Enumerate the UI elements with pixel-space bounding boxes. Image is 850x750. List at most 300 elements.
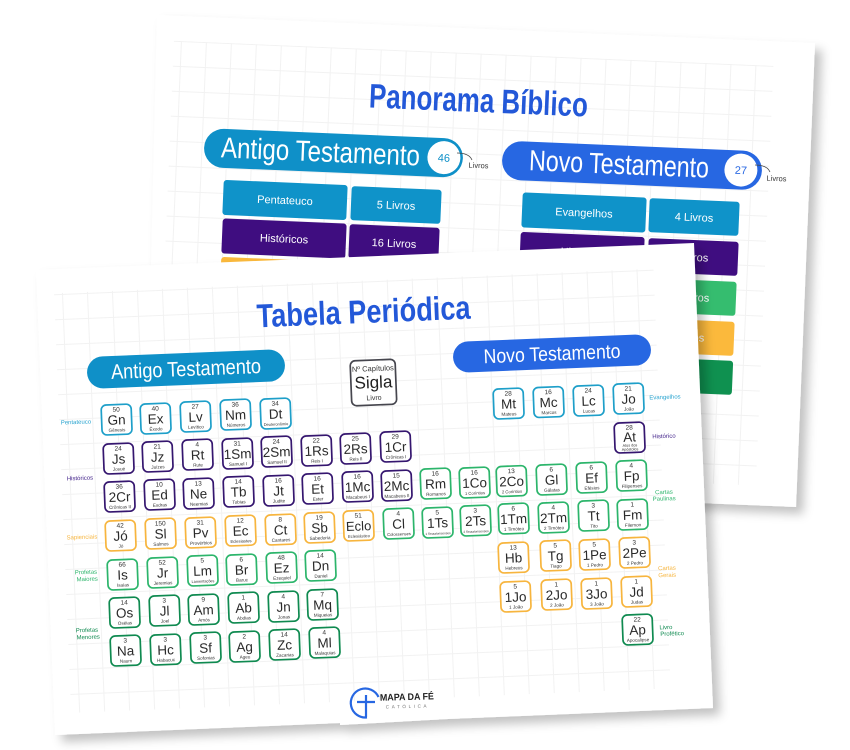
cell: Is: Is — [117, 567, 128, 583]
row: Históricos NT — [519, 232, 645, 272]
cell: 1Co — [459, 467, 490, 498]
cell: 1Ts — [422, 507, 453, 538]
cell: Jt — [263, 475, 294, 506]
cell: Ap: Ap — [629, 622, 646, 638]
cell: Ec: Eclesiastes — [230, 538, 252, 544]
legend cell: Nº Capítulos, Sigla, Livro: Sigla — [354, 372, 393, 393]
cell: 3Jo: 1 — [594, 580, 599, 588]
cell: 1Ts: 1Ts — [427, 515, 449, 531]
side label: Cartas Gerais: Cartas — [658, 566, 676, 572]
cell: Jz: Juízes — [151, 464, 165, 470]
cell: Ml: 4 — [322, 629, 327, 637]
cell: 1Rs — [301, 435, 332, 466]
cell: Is: 66 — [118, 561, 126, 569]
cell: Tb: Tb — [230, 484, 247, 500]
cell: 1Jo — [500, 581, 531, 612]
side label: Profetas Menores: Profetas — [76, 628, 98, 634]
pill: Novo Testamento: Novo Testamento — [483, 341, 621, 368]
cell: Pv: 31 — [196, 519, 204, 527]
row: Históricos NT: Histórico — [560, 246, 604, 260]
cell: Gn: Gênesis — [108, 427, 126, 433]
periodic table cells — [101, 383, 653, 666]
pill: Novo Testamento 27 livros: Novo Testamento — [528, 145, 710, 185]
cell: Hb: Hb — [505, 550, 523, 566]
cell: Ct: Cantares — [272, 537, 291, 543]
cell: 2Cr — [104, 481, 135, 512]
cell: 2Co — [496, 466, 527, 497]
table: Novo Testamento categories — [519, 192, 740, 395]
cell: Ed: Esdras — [153, 502, 168, 508]
cell: 2Jo: 1 — [554, 581, 559, 589]
cell: Tt: 3 — [591, 502, 596, 510]
cell: Sf: 3 — [203, 634, 208, 642]
cell: Nm: 36 — [231, 401, 239, 409]
annotation: Livros 27 — [755, 165, 787, 183]
cell: Dn: Dn — [312, 558, 330, 574]
cell: Js — [103, 443, 134, 474]
cell: 1Jo: 1 João — [509, 604, 523, 610]
cell: Jó: Jó — [118, 543, 124, 549]
row: 5 Livros: 5 Livros — [376, 199, 416, 213]
cell: Lc: Lucas — [583, 408, 596, 414]
cell: Jt: 16 — [274, 477, 282, 485]
cell: Tb — [223, 476, 254, 507]
cell: Zc — [269, 629, 300, 660]
cell: Ml — [309, 627, 340, 658]
side label: Pentateuco: Pentateuco — [61, 419, 92, 427]
cell: Os: 14 — [120, 599, 128, 607]
row: 5 Livros NT — [647, 238, 739, 276]
cell: Sb: 19 — [315, 514, 323, 522]
cell: 1Mc: 1Mc — [345, 479, 371, 495]
cell: Hc: 3 — [163, 636, 168, 644]
cell: Eclo: Eclo — [346, 518, 372, 534]
cell: Ne: Ne — [190, 486, 208, 502]
cell: Ag: 2 — [242, 633, 247, 641]
cell: 2Co: 2 Coríntios — [502, 489, 522, 494]
cell: Lm — [187, 555, 218, 586]
cell: Sl — [145, 518, 176, 549]
cell: Ct: Ct — [274, 522, 288, 538]
side label: Histórico: Histórico — [652, 434, 676, 440]
cell: Ec — [225, 515, 256, 546]
row: Cartas Paulinas count: 14 Livros — [664, 291, 710, 305]
cell: Jr: Jr — [157, 565, 169, 581]
cell: Lm: 5 — [200, 557, 205, 565]
cell: Ct — [265, 514, 296, 545]
pill: Antigo Testamento 46 livros: 46 — [437, 152, 450, 165]
cell: 1Pe: 1Pe — [582, 547, 607, 563]
cell: Sf: Sofonias — [197, 655, 216, 661]
cell: Rm: 16 — [431, 470, 439, 478]
side label: Cartas Gerais: Gerais — [658, 573, 676, 579]
pill: Antigo Testamento — [86, 349, 286, 389]
cell: Jo: João — [624, 406, 635, 412]
row: Históricos: Históricos — [260, 232, 309, 247]
cell: 1Sm: 31 — [233, 440, 241, 448]
cell: Cl: Colossenses — [387, 531, 411, 537]
cell: 2Ts — [460, 505, 491, 536]
cell: Jl — [149, 595, 180, 626]
cell: 2Pe: 3 — [632, 539, 637, 547]
cell: Am: Amós — [198, 617, 211, 623]
cell: Tb: Tobias — [232, 499, 246, 505]
cell: Dt — [260, 398, 291, 429]
cell: 2Tm: 2Tm — [540, 510, 567, 526]
cell: Lm: Lamentações — [192, 579, 215, 584]
side label: Históricos: Históricos — [67, 476, 93, 482]
cell: Mc: Marcos — [541, 410, 557, 415]
cell: Fp: Filipenses — [622, 483, 643, 489]
cell: Dt: 34 — [271, 400, 279, 408]
cell: Dn — [305, 550, 336, 581]
cell: 1Mc: Macabeus I — [346, 494, 370, 500]
cell: Ct: 8 — [278, 516, 283, 524]
cell: Sl: 150 — [155, 520, 166, 528]
cell: 1Tm: 1 Timóteo — [504, 526, 525, 532]
cell: Mq: Miqueias — [314, 612, 333, 618]
cell: Jó: 42 — [116, 522, 124, 530]
cell: Jt: Jt — [273, 483, 284, 499]
cell: Br — [226, 554, 257, 585]
cell: Br: Br — [235, 562, 249, 578]
cell: Js: Josué — [113, 466, 126, 472]
cell: Sl: Sl — [154, 526, 167, 542]
cell: Fm: Fm — [623, 507, 643, 523]
cell: Hb: 13 — [509, 544, 517, 552]
row: Profético count: 1 Livro — [667, 370, 700, 384]
row: Cartas Gerais count: 7 Livros — [665, 331, 705, 345]
cell: Ed: 10 — [155, 481, 163, 489]
cell: Lc — [573, 385, 604, 416]
cell: 2Mc — [381, 470, 412, 501]
cell: 1Tm — [498, 503, 529, 534]
cell: Jd: Judas — [631, 599, 644, 605]
cell: At: Atos dos — [622, 443, 637, 448]
cell: Mt: Mateus — [501, 411, 517, 417]
cell: 1Pe: 1 Pedro — [587, 562, 604, 568]
cell: Mt: Mt — [501, 396, 517, 412]
cell: 2Ts: 2 Tessalonicenses — [463, 529, 489, 534]
cell: 1Co: 16 — [470, 469, 478, 477]
cell: 2Rs: Reis II — [349, 456, 363, 462]
cell: Lm: Lm — [193, 563, 212, 579]
cell: Fm — [617, 499, 648, 530]
row: Profético count — [642, 357, 733, 395]
legend cell: Nº Capítulos, Sigla, Livro: Nº Capítulos — [352, 363, 394, 374]
side label: Profetas Maiores: Maiores — [76, 577, 98, 583]
row: Evangelhos — [521, 192, 647, 233]
side label: Sapienciais: Sapienciais — [67, 534, 97, 542]
cell: Ab — [228, 592, 259, 623]
cell: Jr: 52 — [158, 559, 166, 567]
cell: 2Rs: 2Rs — [343, 441, 368, 457]
cell: Mc — [533, 387, 564, 418]
cell: 2Co: 13 — [507, 468, 515, 475]
cell: Sb: Sb — [311, 520, 328, 536]
cell: Gl: Gl — [545, 472, 559, 488]
cell: Ne: Neemias — [190, 501, 209, 507]
side label: Profetas Menores: Menores — [76, 635, 100, 641]
cell: Is — [107, 559, 138, 590]
cell: 3Jo: 3Jo — [585, 586, 608, 602]
cell: Sf: Sf — [199, 640, 213, 656]
cell: Zc: 14 — [280, 631, 288, 639]
logo subtitle: CATÓLICA — [386, 702, 429, 710]
cell: Jó: Jó — [113, 528, 128, 544]
row: 5 Livros — [350, 186, 442, 224]
cell: 1Rs: 22 — [312, 437, 320, 445]
cell: Na: 3 — [123, 637, 128, 645]
side label: Cartas Paulinas: Cartas — [655, 490, 673, 496]
row: Históricos — [221, 218, 347, 259]
cell: Ap: 22 — [633, 616, 641, 624]
pill: Novo Testamento — [452, 334, 652, 373]
pill: Novo Testamento 27 livros: 27 — [734, 165, 747, 177]
cell: 2Co: 2Co — [499, 474, 524, 490]
cell: Ag: Ag — [236, 639, 253, 655]
cell: Gl — [536, 464, 567, 495]
cell: 1Co: 1 Coríntios — [465, 490, 485, 496]
cell: Jó — [105, 520, 136, 551]
cell: Eclo: Eclesiástico — [348, 533, 371, 539]
cell: Pv: Pv — [192, 525, 209, 541]
cell: Lv: Lv — [188, 409, 203, 425]
cell: Hc — [150, 634, 181, 665]
panel: Panorama Bíblico sheet — [146, 15, 815, 507]
cell: Br: Baruc — [236, 577, 249, 583]
cell: Fp — [616, 460, 647, 491]
cell: Lc: Lc — [581, 393, 596, 409]
cell: Is: Isaías — [117, 582, 130, 588]
cell: Ez — [266, 552, 297, 583]
cell: 2Mc: Macabeus II — [384, 493, 410, 499]
cell: Ex: 40 — [151, 405, 159, 413]
cell: Jn: Jonas — [278, 614, 291, 620]
cell: Sb — [304, 512, 335, 543]
cell: Tg: Tg — [547, 548, 564, 564]
cell: Sf — [190, 632, 221, 663]
cell: Hc: Hc — [157, 642, 174, 658]
cell: 1Sm: 1Sm — [223, 446, 252, 462]
cell: Et: Ester — [313, 496, 324, 502]
cell: Ef — [576, 462, 607, 493]
cell: Eclo — [343, 510, 374, 541]
cell: Lv — [180, 401, 211, 432]
cell: 2Rs — [340, 433, 371, 464]
cell: Jr — [147, 557, 178, 588]
cell: Tt: Tt — [587, 508, 600, 524]
cell: Ec: 12 — [236, 517, 244, 525]
cell: Rm: Rm — [425, 476, 446, 492]
cell: Br: 6 — [239, 556, 244, 564]
cell: 1Cr: 1Cr — [384, 439, 407, 455]
cell: Dt: Dt — [269, 406, 283, 422]
cell: 2Sm: Samuel II — [267, 459, 287, 465]
cell: 1Sm — [222, 438, 253, 469]
side label: Cartas Paulinas: Paulinas — [653, 496, 676, 503]
cell: Os — [109, 597, 140, 628]
cell: Ez: Ez — [273, 560, 290, 576]
cell: Am — [188, 594, 219, 625]
cell: Tt: Tito — [590, 523, 598, 529]
cell: Et — [302, 473, 333, 504]
cell: Cl: 4 — [396, 510, 401, 518]
cell: Ap — [622, 614, 653, 645]
cell: Cl: Cl — [392, 516, 405, 532]
cell: 1Jo: 1Jo — [504, 589, 527, 605]
cell: Lv: Levítico — [188, 424, 204, 430]
title: Panorama Bíblico: Panorama Bíblico — [368, 77, 589, 125]
row: Evangelhos: Evangelhos — [555, 206, 613, 221]
cell: Jz: 21 — [153, 443, 161, 451]
cell: Pv: Provérbios — [190, 540, 213, 546]
cell: 1Sm: Samuel I — [229, 461, 247, 467]
cell: Cl — [383, 508, 414, 539]
cell: 1Co: 1Co — [462, 475, 487, 491]
cell: 2Tm — [538, 502, 569, 533]
cell: 1Pe: 5 — [592, 541, 597, 549]
cell: Pv — [185, 517, 216, 548]
logo wordmark: MAPA DA FÉ — [380, 691, 434, 704]
cell: Rt: 4 — [195, 441, 200, 449]
cell: Js: Js — [112, 451, 126, 467]
cell: Dn: Daniel — [314, 573, 328, 579]
cell: Ef: Ef — [585, 470, 599, 486]
cell: Fm: 1 — [630, 501, 635, 509]
cell: Hb: Hebreus — [505, 565, 523, 571]
cell: Ed: Ed — [151, 487, 168, 503]
cell: Am: Am — [193, 602, 214, 618]
cell: Rt: Rt — [191, 447, 205, 463]
cell: Jl: 3 — [162, 597, 167, 605]
cell: Tg: 5 — [553, 542, 558, 550]
cell: Ab: Ab — [235, 600, 252, 616]
cell: Hb — [498, 542, 529, 573]
cell: Dt: Deuteronômio — [264, 421, 288, 427]
cell: Nm — [220, 399, 251, 430]
cell: Mq: Mq — [313, 597, 332, 613]
cell: Ez: Ezequiel — [273, 575, 291, 581]
cell: 1Tm: 6 — [511, 505, 516, 513]
cell: Ex — [140, 403, 171, 434]
cell: Lv: 27 — [191, 403, 199, 411]
cell: 1Cr: Crônicas I — [386, 454, 406, 460]
cell: Ed — [144, 479, 175, 510]
row: 16 Livros — [348, 224, 440, 262]
cell: 1Mc: 16 — [353, 473, 361, 481]
cell: Jo: Jo — [621, 391, 636, 407]
cell: 1Tm: 1Tm — [500, 511, 527, 527]
cell: Jn: Jn — [276, 599, 291, 615]
cell: Gn — [101, 404, 132, 435]
cell: Jn: 4 — [281, 593, 286, 601]
cell: At: Apóstolos — [622, 447, 639, 452]
cell: Ap: Apocalipse — [627, 637, 650, 643]
cell: Gn: 50 — [112, 406, 120, 414]
cell: Gn: Gn — [107, 412, 126, 428]
cell: Fm: Filemon — [625, 522, 642, 528]
side label: Profetas Maiores: Profetas — [75, 570, 97, 576]
cell: Jd — [621, 576, 652, 607]
cell: 2Jo: 2 João — [550, 602, 564, 608]
cell: 1Ts: 1 Tessalonicenses — [425, 531, 451, 536]
cell: Rt — [182, 439, 213, 470]
cell: 2Pe: 2 Pedro — [627, 560, 644, 566]
cell: 1Ts: 5 — [435, 509, 440, 517]
cell: Fp: Fp — [623, 468, 640, 484]
cell: 1Mc — [342, 471, 373, 502]
cell: 2Pe — [619, 537, 650, 568]
cell: Jn — [268, 591, 299, 622]
cell: 2Mc: 2Mc — [384, 478, 410, 494]
cell: Jr: Jeremias — [154, 580, 173, 586]
cell: Na: Naum — [120, 658, 132, 664]
cell: 2Rs: 25 — [351, 435, 359, 443]
cell: Os: Os — [116, 605, 134, 621]
cell: Et: 16 — [313, 475, 321, 483]
cell: 2Ts: 2Ts — [465, 513, 487, 529]
cell: Gl: Gálatas — [544, 487, 561, 493]
cell: Dn: 14 — [316, 552, 324, 560]
cell: Ex: Ex — [147, 411, 164, 427]
cell: Jo — [613, 383, 644, 414]
pill: Antigo Testamento: Antigo Testamento — [111, 355, 261, 384]
cell: Gl: 6 — [549, 466, 554, 474]
cell: Mt: 28 — [504, 390, 512, 398]
annotation: Livros 46 — [457, 153, 489, 170]
cell: Ec: Ec — [232, 523, 249, 539]
cell: Jd: Jd — [629, 584, 644, 600]
row: Sapienciais: Sapienciais — [254, 271, 311, 285]
cell: Am: 9 — [201, 596, 206, 604]
cell: Fp: 4 — [629, 462, 634, 470]
cell: 1Rs: Reis I — [311, 458, 323, 464]
cell: Hc: Habacuc — [157, 657, 176, 663]
cell: 2Sm: 2Sm — [262, 444, 291, 460]
cell: Ef: 6 — [589, 464, 594, 472]
cell: 2Sm — [261, 436, 292, 467]
pill: Antigo Testamento 46 livros: Antigo Testamento — [220, 132, 421, 173]
cell: Na — [110, 635, 141, 666]
cell: Ab: 1 — [241, 594, 246, 602]
cell: 2Tm: 2 Timóteo — [544, 525, 565, 531]
row: Sapienciais — [220, 257, 345, 297]
cell: 2Jo — [541, 579, 572, 610]
cell: Mt — [493, 388, 524, 419]
cell: 2Cr: Crônicas II — [109, 504, 131, 510]
cell: Tg: Tiago — [550, 563, 562, 569]
cell: Tb: 14 — [234, 478, 242, 486]
cell: 1Rs: 1Rs — [304, 443, 329, 459]
logo: Mapa da Fé Católica — [351, 689, 434, 718]
cell: Jz: Jz — [151, 449, 165, 465]
cell: Jz — [142, 441, 173, 472]
cell: At — [614, 422, 645, 453]
cell: Et: Et — [311, 481, 325, 497]
cell: Nm: Nm — [225, 407, 246, 423]
cell: 2Sm: 24 — [272, 438, 280, 446]
legend cell: Nº Capítulos, Sigla, Livro — [350, 359, 397, 406]
cell: Mq — [307, 589, 338, 620]
cell: Zc: Zacarias — [276, 652, 295, 658]
cell: 2Tm: 4 — [551, 504, 556, 512]
cell: Rm: Romanos — [426, 491, 447, 497]
cell: Eclo: 51 — [354, 512, 362, 520]
annotation: Livros 27: Livros — [766, 174, 787, 183]
side label: Evangelhos: Evangelhos — [649, 394, 681, 402]
cell: Mq: 7 — [320, 591, 325, 599]
